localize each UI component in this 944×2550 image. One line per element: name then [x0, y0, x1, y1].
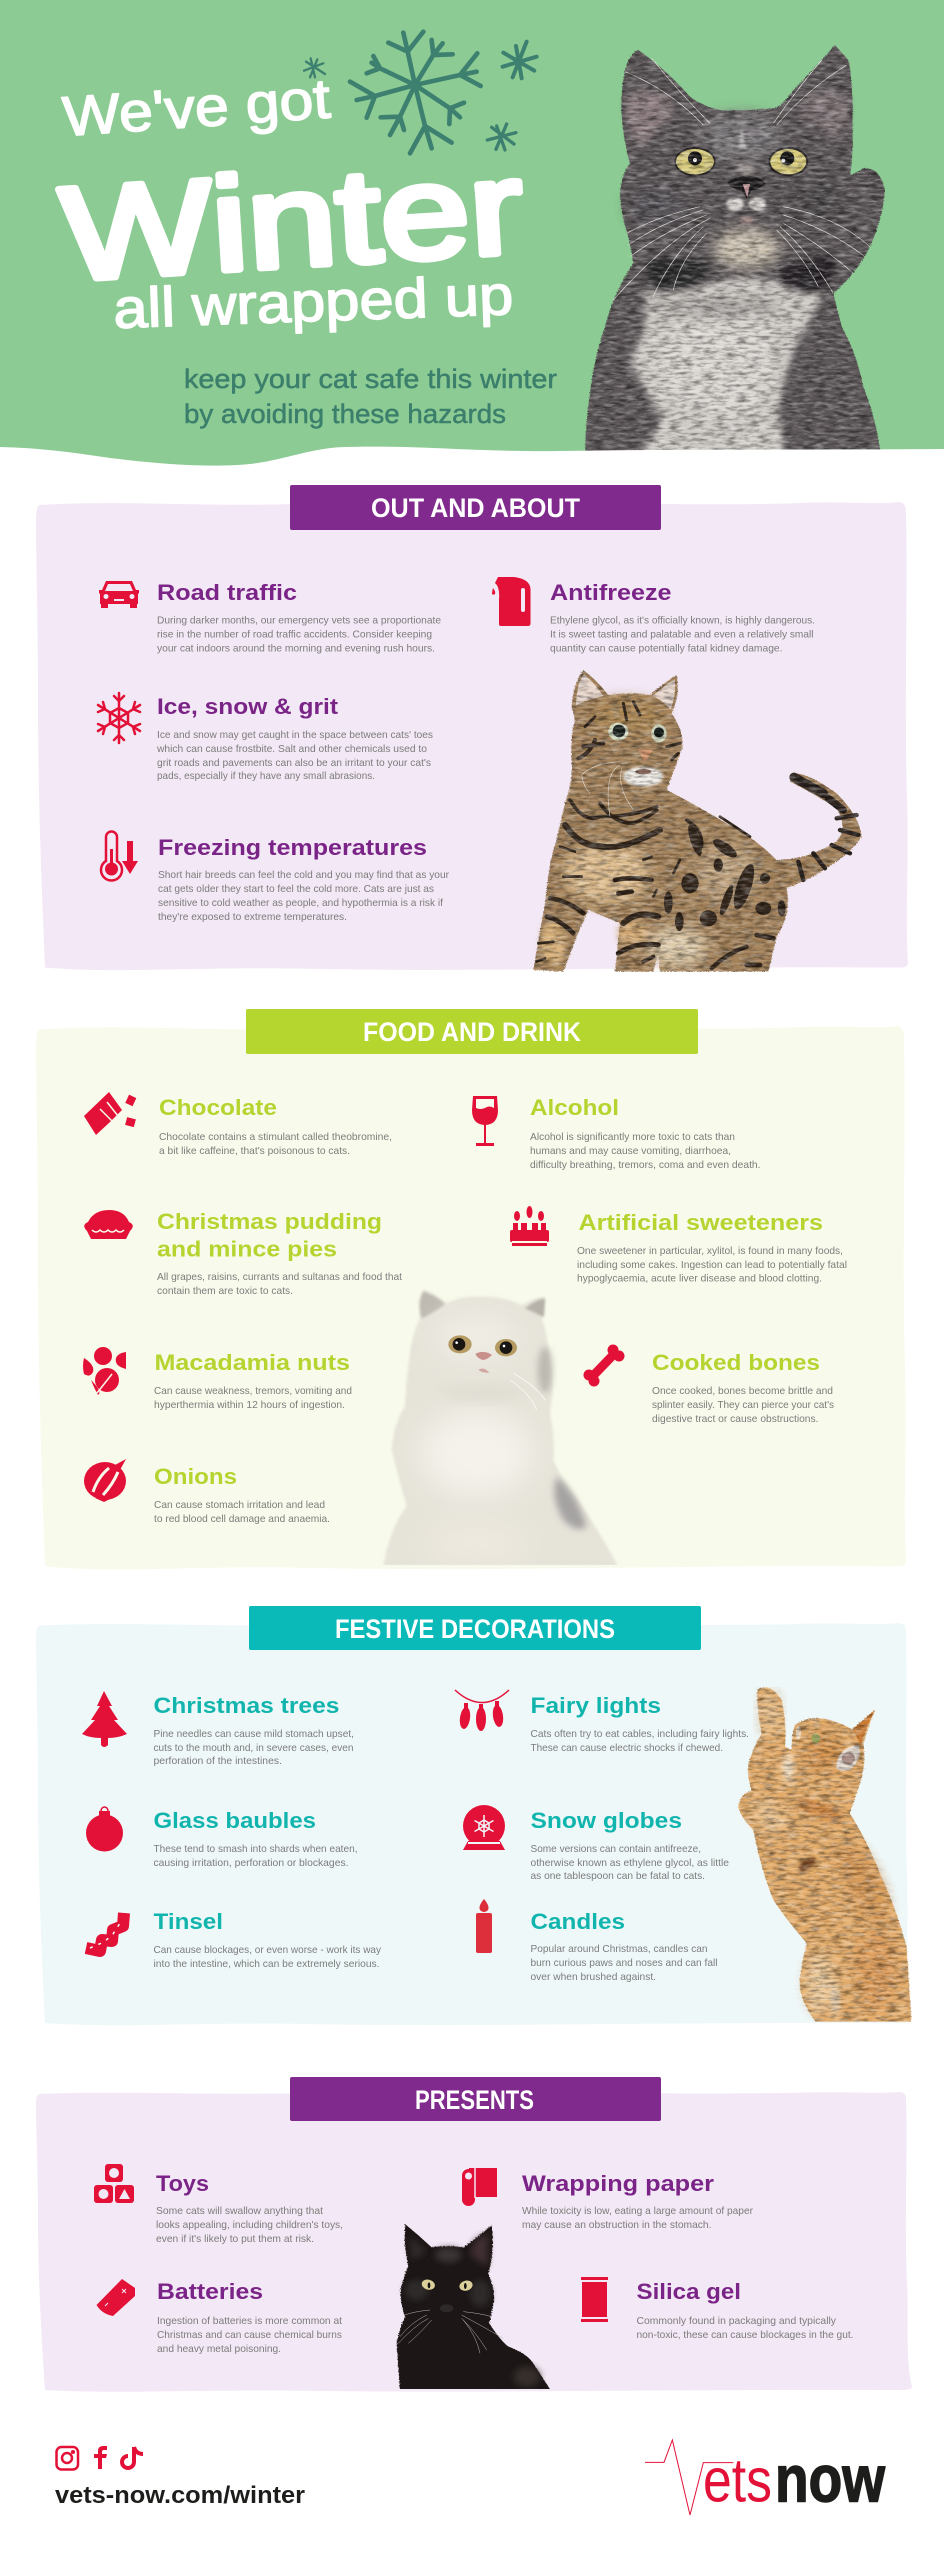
text block: During darker months, our emergency vets see a proportionate — [157, 614, 441, 626]
text block — [159, 1131, 392, 1157]
nose — [727, 176, 766, 198]
shadows — [554, 1477, 587, 1529]
icon: silica gel packet — [581, 2277, 608, 2322]
heading bar — [246, 1009, 698, 1054]
text block: Some versions can contain antifreeze, — [530, 1843, 701, 1855]
text block: and heavy metal poisoning. — [157, 2343, 281, 2355]
panel: festive decorations background — [36, 1623, 908, 2025]
text block: into the intestine, which can be extremely serious. — [154, 1958, 380, 1970]
icon: onion — [84, 1459, 126, 1502]
section: Presents — [36, 2077, 912, 2392]
text block: which can cause frostbite. Salt and other chemicals used to — [156, 743, 427, 755]
logo: Vetsnow — [645, 2440, 886, 2516]
text block: digestive tract or cause obstructions. — [652, 1413, 818, 1425]
text block: may cause an obstruction in the stomach. — [522, 2219, 712, 2231]
text block: perforation of the intestines. — [154, 1755, 282, 1767]
section: Out and About — [36, 485, 908, 972]
item: candles — [476, 1899, 718, 1983]
website address: vets-now.com/winter — [55, 2482, 305, 2509]
text block: pads, especially if they have any small abrasions. — [157, 770, 375, 782]
heading: Onions — [154, 1464, 237, 1489]
text block: to red blood cell damage and anaemia. — [154, 1513, 330, 1525]
item: christmas pudding and mince pies — [84, 1209, 402, 1297]
text block — [154, 1728, 354, 1767]
text block — [636, 2315, 854, 2341]
neck shadows — [646, 258, 712, 292]
ears — [420, 1292, 445, 1318]
heading: Antifreeze — [550, 580, 672, 605]
wavy hero bottom edge — [0, 447, 944, 480]
text block: Alcohol is significantly more toxic to cats than — [530, 1131, 735, 1143]
text block: otherwise known as ethylene glycol, as little — [530, 1857, 729, 1869]
heading: Christmas trees — [154, 1693, 340, 1718]
heading bar: OUT AND ABOUT — [371, 493, 580, 523]
icon: snow globe — [463, 1805, 505, 1850]
item: toys — [94, 2164, 343, 2245]
heading: Snow globes — [530, 1808, 682, 1833]
text block: difficulty breathing, tremors, coma and even death. — [530, 1159, 760, 1171]
icon: birthday cake — [510, 1206, 549, 1246]
text block: quantity can cause potentially fatal kidney damage. — [550, 642, 782, 654]
heading: Candles — [530, 1909, 625, 1934]
icon: thermometer — [101, 832, 138, 880]
text block — [157, 1271, 402, 1297]
icon: fairy lights — [455, 1690, 509, 1731]
section: Food and Drink — [36, 1009, 906, 1569]
text block: Commonly found in packaging and typically — [636, 2315, 837, 2327]
text block — [522, 2205, 753, 2231]
icon: bauble — [86, 1807, 123, 1852]
item: tinsel — [86, 1909, 382, 1970]
text block: as one tablespoon can be fatal to cats. — [530, 1870, 705, 1882]
text block: It is sweet tasting and palatable and even a relatively small — [550, 628, 814, 640]
ear and eye — [853, 1710, 875, 1745]
eyes — [674, 147, 716, 176]
text block — [156, 2205, 343, 2245]
text block: cat gets older they start to feel the cold more. Cats are just as — [158, 883, 434, 895]
heading: Artificial sweeteners — [578, 1210, 823, 1235]
icon: tiktok — [122, 2447, 143, 2468]
heading — [157, 1209, 382, 1262]
text block: cuts to the mouth and, in severe cases, even — [154, 1742, 354, 1754]
heading: Cooked bones — [652, 1350, 820, 1375]
text block: Cats often try to eat cables, including fairy lights. — [530, 1728, 749, 1740]
item: alcohol — [472, 1095, 760, 1171]
heading: Chocolate — [159, 1095, 277, 1120]
item: artificial sweeteners — [510, 1206, 847, 1284]
text block: One sweetener in particular, xylitol, is found in many foods, — [577, 1245, 843, 1257]
muzzle — [713, 228, 780, 268]
text block: even if it's likely to put them at risk. — [156, 2233, 314, 2245]
text block: Popular around Christmas, candles can — [530, 1943, 708, 1955]
whiskers — [613, 58, 870, 300]
text block — [652, 1385, 834, 1425]
text block — [154, 1843, 358, 1869]
heading bar — [290, 485, 661, 530]
text block: looks appealing, including children's toys, — [156, 2219, 343, 2231]
item: batteries — [96, 2279, 342, 2355]
text block: Can cause stomach irritation and lead — [154, 1499, 325, 1511]
panel: presents background — [36, 2092, 912, 2392]
heading: Alcohol — [530, 1095, 619, 1120]
text block: Some cats will swallow anything that — [156, 2205, 323, 2217]
heading: and mince pies — [157, 1236, 337, 1262]
icon: christmas tree — [82, 1691, 127, 1747]
text block: grit roads and pavements can also be an irritant to your cat's — [157, 757, 431, 769]
hero banner — [0, 0, 944, 480]
item: antifreeze — [492, 577, 815, 654]
text block: causing irritation, perforation or blockages. — [154, 1857, 348, 1869]
belly — [563, 843, 650, 903]
tail markings — [794, 777, 858, 880]
item: cooked bones — [584, 1344, 834, 1425]
text block: your cat indoors around the morning and evening rush hours. — [157, 642, 435, 654]
icon: battery — [96, 2279, 135, 2316]
whiskers — [398, 2310, 503, 2353]
item: wrapping paper — [462, 2168, 753, 2231]
icon: large snowflake — [350, 32, 481, 153]
icon: facebook — [94, 2446, 107, 2469]
forehead — [700, 113, 783, 160]
text block: rise in the number of road traffic accidents. Consider keeping — [157, 628, 432, 640]
item: chocolate — [84, 1092, 392, 1157]
text block: hypoglycaemia, acute liver disease and blood clotting. — [577, 1272, 822, 1284]
icon: snowflake — [98, 693, 140, 743]
text block: These tend to smash into shards when eaten, — [154, 1843, 358, 1855]
text block — [530, 1943, 718, 1983]
icon: instagram — [56, 2447, 78, 2470]
icon: antifreeze bottle — [492, 577, 530, 626]
text block: These can cause electric shocks if chewed. — [530, 1742, 723, 1754]
text block — [156, 729, 433, 782]
heading: Tinsel — [154, 1909, 223, 1934]
face — [448, 1335, 472, 1353]
hero cat: grey and white kitten — [585, 45, 885, 460]
item: road traffic — [99, 580, 441, 654]
shading — [839, 1842, 898, 1920]
text block — [154, 1385, 352, 1411]
text block: Chocolate contains a stimulant called theobromine, — [159, 1131, 392, 1143]
icon: bone — [584, 1344, 624, 1386]
face — [623, 767, 663, 787]
icon: small snowflakes — [304, 42, 537, 150]
title: Winter: Winter — [57, 133, 527, 308]
subtitle — [184, 364, 557, 429]
text block: over when brushed against. — [530, 1971, 656, 1983]
white throat and dark fold — [784, 1754, 793, 1782]
item: fairy lights — [455, 1690, 749, 1754]
text block: sensitive to cold weather as people, and hypothermia is a risk if — [158, 897, 443, 909]
heading: Wrapping paper — [522, 2171, 714, 2196]
heading bar: FOOD AND DRINK — [363, 1017, 581, 1047]
title: all wrapped up: all wrapped up — [112, 263, 514, 340]
text block: splinter easily. They can pierce your cat's — [652, 1399, 834, 1411]
photo: white persian cat — [383, 1289, 618, 1567]
text block: While toxicity is low, eating a large amount of paper — [522, 2205, 753, 2217]
markings — [537, 702, 773, 968]
heading: Ice, snow & grit — [157, 694, 339, 719]
text block — [154, 1499, 330, 1525]
ear insides — [626, 92, 673, 144]
text block: Ice and snow may get caught in the space between cats' toes — [157, 729, 433, 741]
cheeks — [628, 187, 688, 227]
fur highlights — [470, 2233, 488, 2267]
heading bar — [249, 1606, 701, 1650]
icon: chocolate bar — [84, 1092, 136, 1135]
chest — [630, 278, 823, 460]
logo: Vetsnow: ets — [703, 2446, 772, 2516]
text block: Pine needles can cause mild stomach upset, — [154, 1728, 354, 1740]
text block: humans and may cause vomiting, diarrhoea, — [530, 1145, 731, 1157]
title: We've got: We've got — [60, 66, 333, 148]
text block — [530, 1843, 729, 1882]
icon: wrapping paper roll — [462, 2168, 497, 2206]
item: snow globes — [463, 1805, 729, 1882]
text block: they're exposed to extreme temperatures. — [158, 911, 347, 923]
text block: Can cause weakness, tremors, vomiting and — [154, 1385, 352, 1397]
item: silica gel — [581, 2277, 854, 2341]
photo: ginger cat — [738, 1687, 912, 2023]
photo: black cat — [397, 2224, 552, 2392]
text block — [577, 1245, 847, 1284]
section: Festive Decorations — [36, 1606, 912, 2025]
text block: Once cooked, bones become brittle and — [652, 1385, 833, 1397]
heading: Freezing temperatures — [158, 835, 427, 860]
icon: pie — [84, 1210, 133, 1239]
text block: hyperthermia within 12 hours of ingestion. — [154, 1399, 345, 1411]
text block — [154, 1944, 382, 1970]
text block — [158, 869, 449, 923]
icon: tinsel — [86, 1913, 124, 1951]
text block — [530, 1728, 749, 1754]
text block: non-toxic, these can cause blockages in the gut. — [636, 2329, 854, 2341]
heading: Christmas pudding — [157, 1209, 382, 1234]
text block: Can cause blockages, or even worse - work its way — [154, 1944, 382, 1956]
heading: Macadamia nuts — [154, 1350, 350, 1375]
heading: Glass baubles — [154, 1808, 316, 1833]
subtitle: keep your cat safe this winter — [184, 364, 557, 394]
text block: Christmas and can cause chemical burns — [157, 2329, 342, 2341]
heading: Silica gel — [636, 2279, 741, 2304]
text block: Short hair breeds can feel the cold and you may find that as your — [158, 869, 449, 881]
item: freezing temperatures — [101, 832, 449, 923]
heading: Batteries — [157, 2279, 263, 2304]
text block: burn curious paws and noses and can fall — [530, 1957, 718, 1969]
text block: Ethylene glycol, as it's officially known, is highly dangerous. — [550, 614, 815, 626]
text block: a bit like caffeine, that's poisonous to cats. — [159, 1145, 350, 1157]
eyes — [422, 2280, 435, 2290]
text block — [530, 1131, 760, 1171]
text block: Ingestion of batteries is more common at — [157, 2315, 342, 2327]
text block: contain them are toxic to cats. — [157, 1285, 293, 1297]
item: onions — [84, 1459, 330, 1525]
item: ice snow and grit — [98, 693, 433, 782]
logo: Vetsnow: now — [775, 2442, 886, 2516]
ears — [576, 674, 603, 705]
item: macadamia nuts — [83, 1347, 352, 1411]
social icons — [56, 2446, 143, 2470]
item: christmas trees — [82, 1691, 354, 1767]
heading bar: PRESENTS — [415, 2085, 534, 2115]
text block: including some cakes. Ingestion can lead to potentially fatal — [577, 1259, 847, 1271]
icon: wine glass — [472, 1096, 498, 1146]
footer — [55, 2440, 886, 2516]
subtitle: by avoiding these hazards — [184, 399, 506, 429]
text block — [157, 614, 441, 654]
heading bar — [290, 2077, 661, 2121]
icon: candle — [476, 1899, 492, 1953]
heading: Toys — [156, 2171, 209, 2196]
panel: food and drink background — [36, 1026, 906, 1569]
panel: out and about background — [36, 502, 908, 970]
text block — [550, 614, 815, 654]
icon: nuts — [83, 1347, 126, 1395]
icon: toy blocks — [94, 2164, 134, 2203]
text block: All grapes, raisins, currants and sultanas and food that — [157, 1271, 402, 1283]
heading: Road traffic — [157, 580, 297, 605]
icon: car — [99, 581, 139, 608]
item: glass baubles — [86, 1807, 358, 1869]
photo: bengal cat — [533, 670, 862, 972]
heading bar: FESTIVE DECORATIONS — [335, 1614, 615, 1644]
text block — [157, 2315, 342, 2355]
heading: Fairy lights — [530, 1693, 661, 1718]
